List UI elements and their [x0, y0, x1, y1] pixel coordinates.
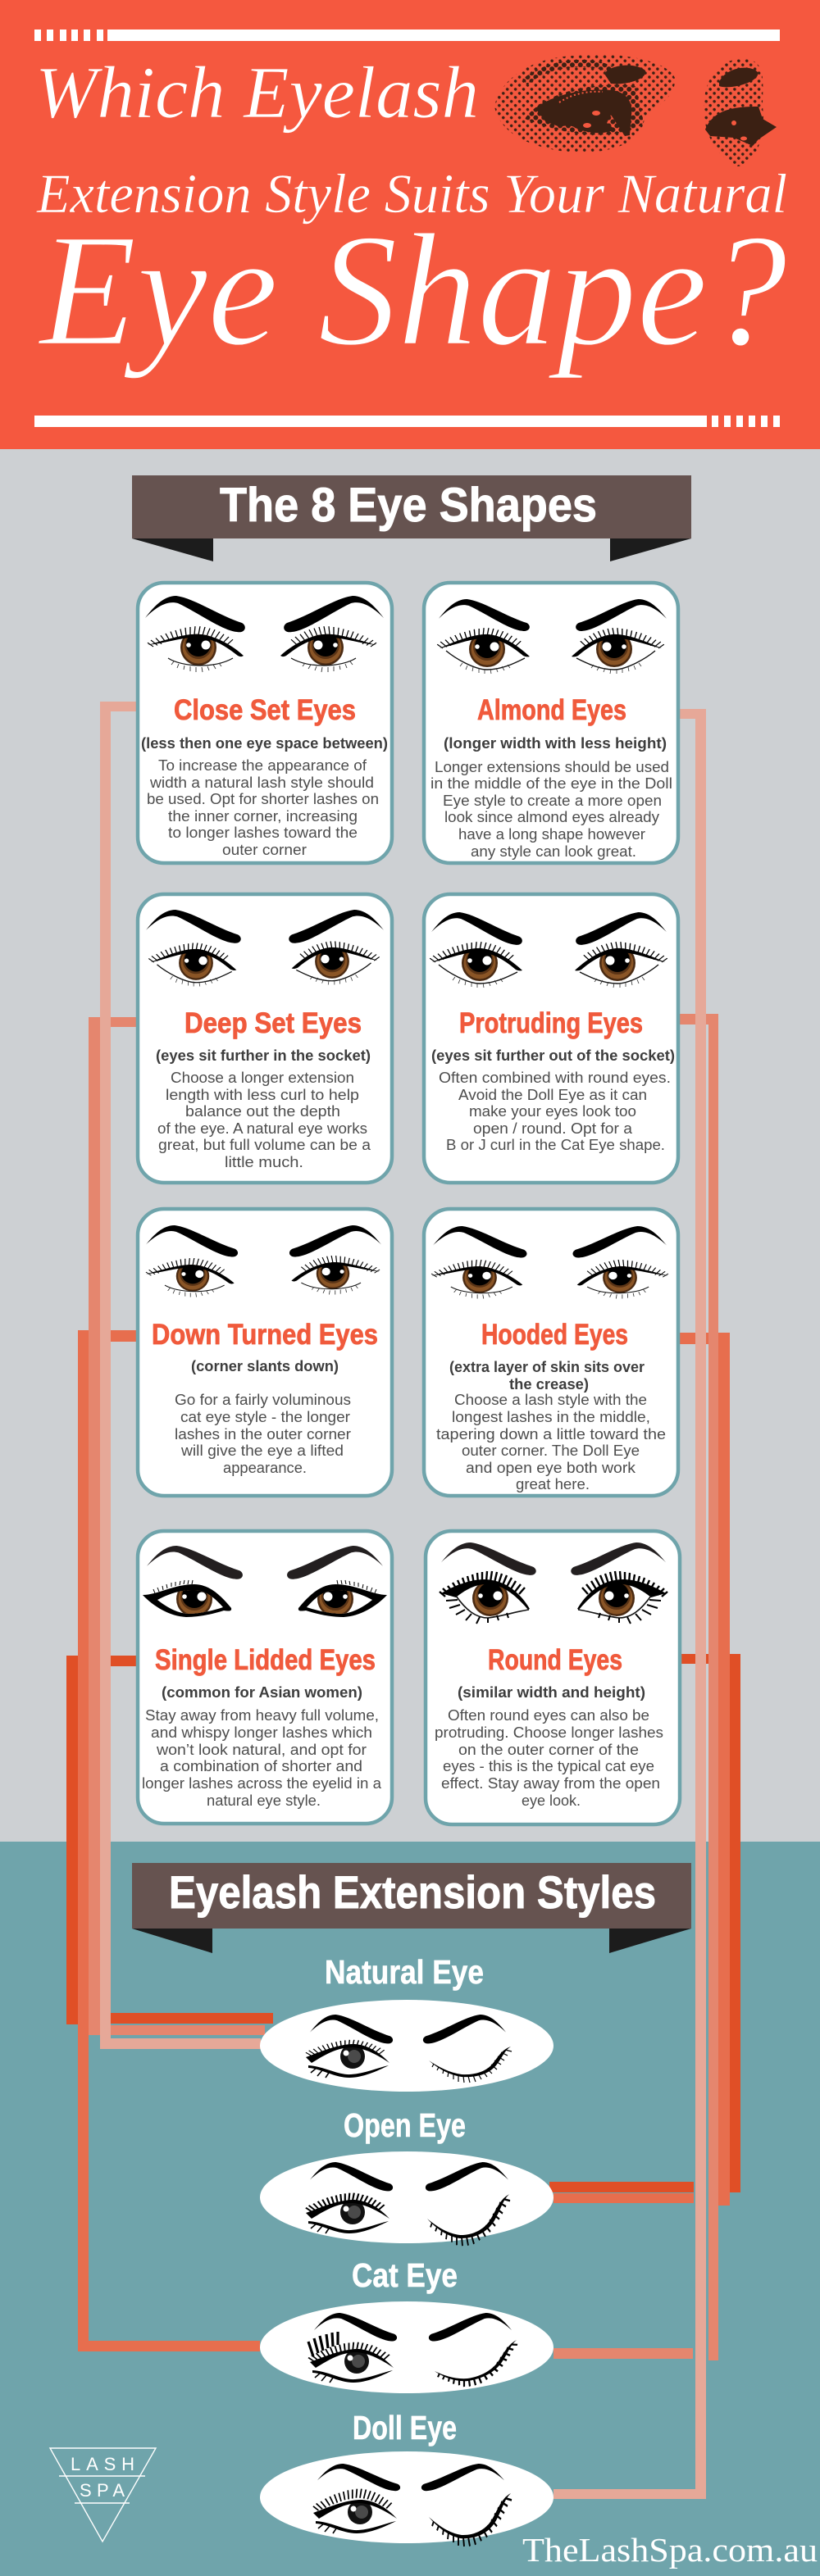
card body: will give the eye a lifted	[180, 1442, 344, 1459]
card title: Round Eyes	[488, 1644, 622, 1676]
card title: Deep Set Eyes	[184, 1007, 362, 1039]
icon: almond eyes	[437, 599, 667, 674]
card body: little much.	[225, 1154, 303, 1170]
icon: round eyes	[440, 1542, 667, 1624]
card body: length with less curl to help	[166, 1087, 359, 1103]
card body	[142, 1707, 382, 1809]
card body: effect. Stay away from the open	[441, 1775, 660, 1792]
panel: hooded eyes	[424, 1209, 678, 1496]
card body: longer lashes across the eyelid in a	[142, 1775, 382, 1792]
panel: protruding eyes	[424, 894, 678, 1183]
icon: single lidded eyes	[143, 1546, 387, 1617]
card body: open / round. Opt for a	[473, 1120, 633, 1137]
panel: close set eyes	[138, 583, 392, 863]
page background: teal section	[0, 1842, 820, 2576]
title line 1: Which Eyelash	[35, 52, 479, 134]
card body: B or J curl in the Cat Eye shape.	[446, 1137, 665, 1153]
card body: make your eyes look too	[469, 1103, 636, 1120]
card body: Longer extensions should be used	[435, 759, 669, 775]
card title: Close Set Eyes	[174, 694, 356, 726]
illustration	[260, 2000, 554, 2092]
illustration	[260, 2451, 554, 2548]
card body	[175, 1392, 351, 1476]
connector lines left and right	[66, 702, 740, 2499]
bottom ruled bar	[34, 416, 780, 427]
card title: Hooded Eyes	[481, 1319, 628, 1351]
panel: round eyes	[426, 1531, 680, 1824]
panel: almond eyes	[424, 583, 678, 863]
card body: Go for a fairly voluminous	[175, 1392, 351, 1408]
style: cat eye	[260, 2256, 554, 2394]
card body: natural eye style.	[207, 1792, 321, 1809]
style: doll eye	[260, 2409, 554, 2548]
card body: eyes - this is the typical cat eye	[443, 1758, 654, 1774]
card body: outer corner	[222, 842, 307, 858]
card body: protruding. Choose longer lashes	[435, 1724, 663, 1741]
style: natural eye	[260, 1953, 554, 2092]
illustration	[260, 2301, 554, 2394]
title line 2: Extension Style Suits Your Natural	[36, 162, 787, 225]
style title: Open Eye	[344, 2106, 466, 2144]
card body: outer corner. The Doll Eye	[462, 1442, 640, 1459]
card title: Almond Eyes	[477, 694, 626, 726]
card title: Down Turned Eyes	[152, 1319, 378, 1351]
card body: Avoid the Doll Eye as it can	[458, 1087, 647, 1103]
card subtitle: the crease)	[509, 1376, 589, 1392]
panel: deep set eyes	[138, 894, 392, 1183]
card body: balance out the depth	[185, 1103, 340, 1120]
card body	[147, 757, 379, 858]
style title: Cat Eye	[352, 2256, 458, 2294]
card subtitle: (eyes sit further in the socket)	[156, 1047, 371, 1064]
card title: Single Lidded Eyes	[155, 1644, 376, 1676]
card body: Often round eyes can also be	[448, 1707, 649, 1724]
card body: Often combined with round eyes.	[439, 1070, 671, 1086]
card subtitle	[449, 1359, 645, 1392]
card body: Choose a lash style with the	[454, 1392, 647, 1408]
card body: eye look.	[522, 1792, 581, 1809]
card subtitle: (less then one eye space between)	[141, 735, 388, 752]
heading: Eyelash Extension Styles	[169, 1866, 656, 1918]
icon: protruding eyes	[430, 912, 667, 988]
icon: halftone eye large	[494, 55, 675, 152]
style: open eye	[260, 2106, 554, 2248]
banner: The 8 Eye Shapes	[132, 475, 691, 561]
panel: down turned eyes	[138, 1209, 392, 1496]
card body: great here.	[516, 1476, 590, 1492]
card title: Protruding Eyes	[459, 1007, 643, 1039]
card body: in the middle of the eye in the Doll	[430, 775, 672, 792]
card body: great, but full volume can be a	[158, 1137, 371, 1153]
card subtitle: (extra layer of skin sits over	[449, 1359, 645, 1375]
card body: on the outer corner of the	[458, 1742, 639, 1758]
icon: halftone eye small	[704, 59, 777, 166]
panel: single lidded eyes	[138, 1531, 392, 1824]
card body: and whispy longer lashes which	[151, 1724, 372, 1741]
card body: Eye style to create a more open	[443, 793, 662, 809]
card body: appearance.	[223, 1460, 307, 1476]
icon: deep set eyes	[146, 910, 384, 987]
page background: grey section	[0, 0, 820, 1842]
illustration	[260, 2151, 554, 2248]
heading: The 8 Eye Shapes	[220, 479, 597, 532]
style title: Natural Eye	[325, 1953, 484, 1991]
card body: any style can look great.	[471, 843, 636, 860]
card body: lashes in the outer corner	[175, 1426, 351, 1442]
card body: Choose a longer extension	[171, 1070, 354, 1086]
card body: a combination of shorter and	[160, 1758, 362, 1774]
card body: To increase the appearance of	[158, 757, 367, 774]
card body: cat eye style - the longer	[180, 1409, 350, 1425]
header panel	[0, 0, 820, 449]
card body: look since almond eyes already	[444, 809, 659, 825]
icon: hooded eyes	[431, 1226, 668, 1298]
card body	[157, 1070, 371, 1170]
card body: won’t look natural, and opt for	[156, 1742, 367, 1758]
card body	[435, 1707, 663, 1809]
card body: to longer lashes toward the	[168, 825, 358, 841]
card subtitle: (eyes sit further out of the socket)	[431, 1047, 675, 1064]
card body: and open eye both work	[466, 1460, 636, 1476]
card subtitle: (longer width with less height)	[444, 735, 667, 752]
icon: close set eyes	[145, 596, 384, 672]
card body: Stay away from heavy full volume,	[145, 1707, 379, 1724]
style title: Doll Eye	[353, 2409, 457, 2447]
card subtitle: (similar width and height)	[458, 1684, 645, 1701]
card body: of the eye. A natural eye works	[157, 1120, 367, 1137]
card body	[439, 1070, 671, 1153]
card body: width a natural lash style should	[149, 775, 374, 791]
card body: have a long shape however	[458, 826, 645, 843]
card body: be used. Opt for shorter lashes on	[147, 791, 379, 807]
card subtitle: (common for Asian women)	[162, 1684, 362, 1701]
card body: tapering down a little toward the	[436, 1426, 666, 1442]
banner: Eyelash Extension Styles	[132, 1863, 691, 1953]
card body	[430, 759, 672, 860]
card body: longest lashes in the middle,	[452, 1409, 650, 1425]
website address: TheLashSpa.com.au	[522, 2531, 818, 2569]
top ruled bar	[34, 30, 780, 41]
title line 3: Eye Shape?	[37, 200, 787, 379]
card subtitle: (corner slants down)	[191, 1358, 339, 1374]
icon: down turned eyes	[146, 1225, 381, 1297]
card body: the inner corner, increasing	[168, 808, 358, 825]
logo: Lash Spa triangle: LASH	[71, 2454, 134, 2474]
logo: Lash Spa triangle: SPA	[80, 2480, 125, 2501]
logo: Lash Spa triangle	[50, 2448, 156, 2542]
card body	[436, 1392, 666, 1492]
